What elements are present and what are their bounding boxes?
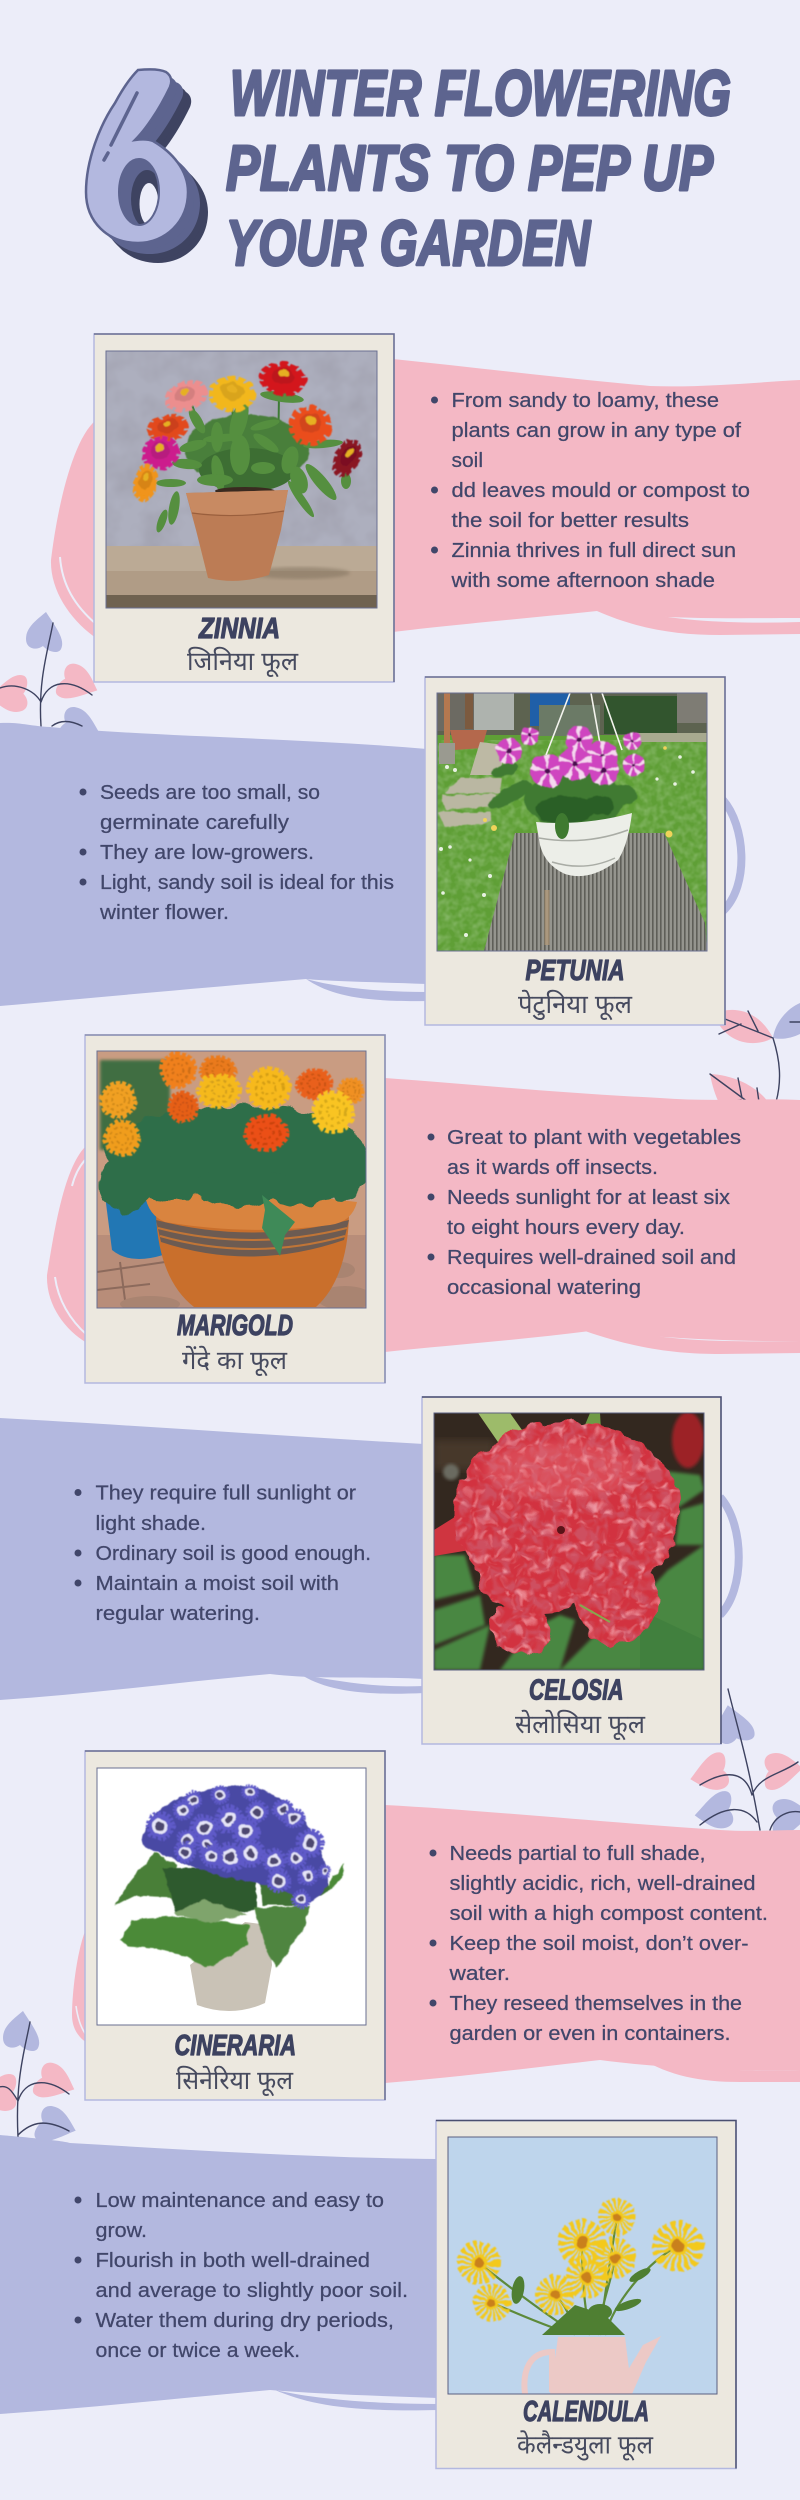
hindi name: calendula: केलैन्डयुला फूल: [517, 2430, 653, 2462]
bullet list: marigold: to eight hours every day.: [447, 1217, 685, 1239]
bullet list: petunia: Light, sandy soil is ideal for this: [100, 872, 394, 894]
bullet list: cineraria: water.: [448, 1963, 510, 1985]
panel: cineraria blob: [72, 1805, 800, 2083]
title number 6: [86, 69, 208, 263]
photo: red celosia flower: [434, 1412, 704, 1670]
bullet list: cineraria: [430, 1843, 768, 2045]
panel: zinnia blob: [51, 359, 800, 638]
photo: calendula in pink teapot: [448, 2137, 717, 2394]
photo: petunia hanging basket: [437, 693, 707, 951]
bullet list: marigold: Great to plant with vegetables: [447, 1127, 741, 1149]
bullet list: calendula: once or twice a week.: [96, 2340, 300, 2362]
hindi name: celosia: सेलोसिया फूल: [515, 1709, 645, 1741]
decorative leaves 4: [0, 2011, 79, 2147]
photo: marigolds in clay pot: [97, 1051, 373, 1312]
bullet list: cineraria: Keep the soil moist, don’t over-: [450, 1933, 748, 1955]
bullet list: petunia: [80, 782, 394, 924]
panel: calendula blob: [0, 2135, 438, 2414]
bullet list: zinnia: Zinnia thrives in full direct sun: [452, 540, 736, 562]
hindi name: petunia: पेटुनिया फूल: [518, 989, 632, 1021]
bullet list: cineraria: garden or even in containers.: [450, 2023, 730, 2045]
title: YOUR GARDEN: [226, 207, 591, 279]
bullet list: calendula: Water them during dry periods,: [96, 2310, 394, 2332]
card: calendula: [436, 2120, 736, 2468]
bullet list: celosia: Ordinary soil is good enough.: [96, 1543, 371, 1565]
card: celosia: [422, 1397, 721, 1744]
bullet list: celosia: They require full sunlight or: [96, 1482, 356, 1504]
bullet list: calendula: Flourish in both well-drained: [96, 2250, 370, 2272]
bullet list: calendula: [74, 2190, 408, 2362]
title: [226, 57, 731, 279]
panel: petunia blob: [0, 723, 741, 1006]
bullet list: celosia: regular watering.: [96, 1603, 260, 1625]
bullet list: cineraria: They reseed themselves in the: [450, 1993, 742, 2015]
bullet list: zinnia: dd leaves mould or compost to: [452, 480, 750, 502]
name: zinnia: ZINNIA: [198, 613, 280, 645]
bullet list: calendula: grow.: [96, 2220, 147, 2242]
bullet list: zinnia: From sandy to loamy, these: [452, 390, 719, 412]
photo: zinnia plant in terracotta pot: [106, 351, 377, 608]
photo: cineraria plant: [97, 1768, 366, 2025]
name: cineraria: CINERARIA: [174, 2030, 296, 2062]
decorative leaves 1: [0, 612, 102, 748]
bullet list: cineraria: Needs partial to full shade,: [450, 1843, 706, 1865]
bullet list: zinnia: soil: [452, 450, 483, 472]
card: zinnia: [94, 334, 394, 682]
bullet list: zinnia: the soil for better results: [452, 510, 689, 532]
bullet list: celosia: light shade.: [96, 1513, 206, 1535]
bullet list: marigold: Requires well-drained soil and: [447, 1247, 736, 1269]
card: marigold: [85, 1035, 385, 1383]
hindi name: marigold: गेंदे का फूल: [182, 1345, 287, 1377]
bullet list: calendula: Low maintenance and easy to: [96, 2190, 384, 2212]
bullet list: marigold: [428, 1127, 741, 1299]
name: marigold: MARIGOLD: [177, 1310, 293, 1342]
bullet list: cineraria: soil with a high compost content.: [450, 1903, 768, 1925]
bullet list: celosia: [74, 1482, 371, 1625]
card: petunia: [425, 677, 725, 1025]
decorative leaves 3: [685, 1689, 800, 1837]
bullet list: marigold: occasional watering: [447, 1277, 641, 1299]
name: petunia: PETUNIA: [526, 955, 624, 987]
name: calendula: CALENDULA: [523, 2396, 649, 2428]
bullet list: zinnia: with some afternoon shade: [450, 570, 715, 592]
bullet list: petunia: Seeds are too small, so: [100, 782, 320, 804]
bullet list: petunia: winter flower.: [99, 902, 229, 924]
bullet list: marigold: Needs sunlight for at least six: [447, 1187, 730, 1209]
hindi name: cineraria: सिनेरिया फूल: [176, 2065, 293, 2097]
name: celosia: CELOSIA: [529, 1674, 624, 1706]
bullet list: petunia: They are low-growers.: [100, 842, 314, 864]
decorative leaves 2: [710, 1003, 800, 1105]
bullet list: cineraria: slightly acidic, rich, well-drained: [450, 1873, 756, 1895]
bullet list: calendula: and average to slightly poor soil.: [96, 2280, 408, 2302]
panel: marigold blob: [47, 1078, 800, 1354]
bullet list: petunia: germinate carefully: [100, 812, 289, 834]
bullet list: zinnia: [431, 390, 750, 592]
hindi name: zinnia: जिनिया फूल: [187, 646, 298, 678]
card: cineraria: [85, 1751, 385, 2100]
bullet list: celosia: Maintain a moist soil with: [96, 1573, 339, 1595]
panel: celosia blob: [0, 1418, 739, 1700]
bullet list: marigold: as it wards off insects.: [447, 1157, 658, 1179]
bullet list: zinnia: plants can grow in any type of: [452, 420, 741, 442]
